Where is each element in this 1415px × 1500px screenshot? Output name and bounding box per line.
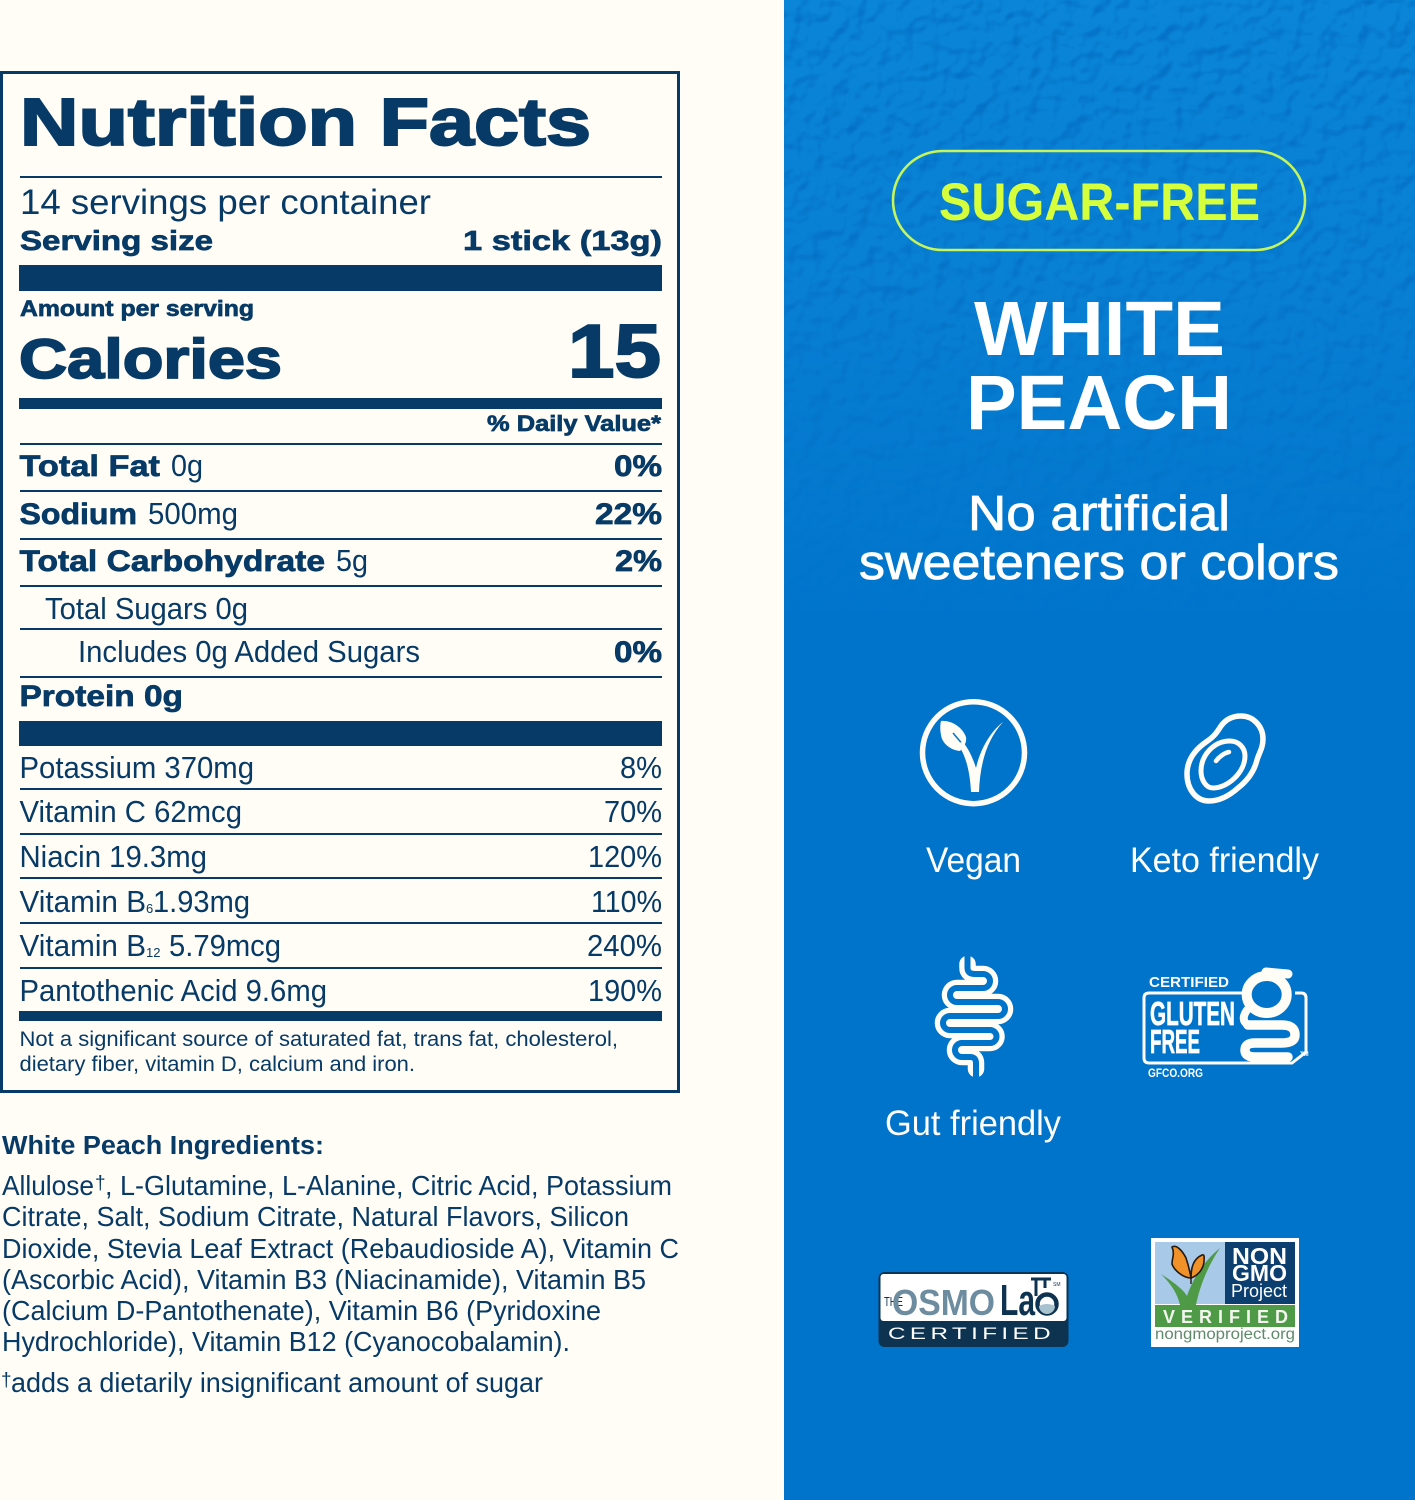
calories row: 15 (568, 309, 661, 393)
water droplet texture (784, 0, 1415, 390)
panel: blue product claims (784, 0, 1415, 1500)
title: white peach (966, 286, 1232, 446)
row: vitamin B6 (20, 884, 662, 919)
badge: sugar-free (893, 151, 1305, 250)
row: vitamin B12: 12 (146, 945, 160, 960)
row: vitamin B6: 110% (591, 884, 662, 919)
serving size row: Serving size (20, 225, 213, 256)
row: sodium (20, 496, 662, 531)
logo: certified gluten free: CERTIFIED (1149, 974, 1229, 991)
logo: certified gluten free: TM (1300, 1052, 1309, 1058)
title: white peach: WHITE (974, 286, 1225, 372)
label border (2, 72, 678, 1092)
ingredients list: (Calcium D-Pantothenate), Vitamin B6 (Pyridoxine (2, 1295, 601, 1326)
amount per serving: Amount per serving (20, 296, 254, 321)
logo: the osmo lab certified: SM (1053, 1282, 1060, 1288)
subtitle: No artificial (968, 487, 1230, 541)
row: added sugars (78, 634, 662, 669)
logo: the osmo lab certified: OSMO (892, 1282, 995, 1323)
logo: certified gluten free: GFCO.ORG (1148, 1068, 1203, 1080)
logo: the osmo lab certified: La (1000, 1276, 1035, 1325)
icon: avocado (1187, 716, 1263, 801)
servings per container: 14 servings per container (20, 183, 431, 222)
label footnote: Not a significant source of saturated fat, trans fat, cholesterol, (20, 1027, 618, 1051)
logo: certified gluten free: FREE (1150, 1023, 1200, 1060)
row: total fat: 0% (614, 450, 662, 483)
row: potassium: 8% (620, 750, 662, 785)
ingredients list: Hydrochloride), Vitamin B12 (Cyanocobalamin). (2, 1326, 570, 1357)
badge: sugar-free: SUGAR-FREE (939, 173, 1260, 232)
logo: the osmo lab certified: CERTIFIED (888, 1325, 1055, 1343)
blue background (784, 0, 1415, 1500)
subtitle (859, 487, 1339, 590)
row: potassium: Potassium 370mg (20, 750, 254, 785)
row: vitamin C: 70% (604, 794, 662, 829)
icon: gut (943, 950, 1005, 1085)
row: sodium: 500mg (148, 496, 238, 531)
ingredients list: , L-Glutamine, L-Alanine, Citric Acid, Potassium (105, 1170, 672, 1201)
ingredients list: (Ascorbic Acid), Vitamin B3 (Niacinamide), Vitamin B5 (2, 1264, 646, 1295)
row: niacin (20, 839, 662, 874)
ingredients list: Allulose (2, 1170, 94, 1201)
logo: non gmo project verified: nongmoproject.org (1155, 1326, 1295, 1343)
logo: non gmo project verified: Project (1231, 1281, 1287, 1301)
label footnote (20, 1027, 618, 1076)
calories row (19, 309, 661, 393)
label: gut friendly: Gut friendly (885, 1104, 1061, 1143)
ingredients list: Citrate, Salt, Sodium Citrate, Natural Flavors, Silicon (2, 1201, 629, 1232)
row: pantothenic acid: 190% (588, 973, 662, 1008)
row: sodium: 22% (595, 498, 662, 531)
row: pantothenic acid (20, 973, 662, 1008)
row: total carbohydrate: 5g (336, 543, 368, 578)
label: keto friendly: Keto friendly (1130, 841, 1319, 880)
ingredients heading: White Peach Ingredients: (2, 1132, 324, 1160)
row: niacin: 120% (588, 839, 662, 874)
row: vitamin B12: Vitamin B (20, 928, 146, 963)
row: total carbohydrate: Total Carbohydrate (20, 545, 325, 578)
row: pantothenic acid: Pantothenic Acid 9.6mg (20, 973, 327, 1008)
ingredients list (2, 1170, 679, 1357)
heading: Nutrition Facts: Nutrition Facts (20, 85, 591, 160)
row: vitamin B6: Vitamin B (20, 884, 146, 919)
row: vitamin B6: 1.93mg (153, 884, 250, 919)
logo: certified gluten free (1144, 972, 1309, 1080)
row: total fat: Total Fat (20, 450, 160, 483)
logo: non gmo project verified: VERIFIED (1163, 1307, 1288, 1327)
logo: the osmo lab certified: THE (884, 1294, 903, 1309)
row: added sugars: Includes 0g Added Sugars (78, 634, 420, 669)
row: niacin: Niacin 19.3mg (20, 839, 207, 874)
row: total fat: 0g (171, 448, 203, 483)
row: total fat (20, 448, 662, 483)
panel: nutrition facts label (2, 72, 678, 1092)
subtitle: sweeteners or colors (859, 536, 1339, 590)
row: vitamin C: Vitamin C 62mcg (20, 794, 242, 829)
row: added sugars: 0% (614, 636, 662, 669)
row: sodium: Sodium (20, 498, 137, 531)
row: potassium (20, 750, 662, 785)
ingredients footnote: adds a dietarily insignificant amount of sugar (11, 1367, 543, 1398)
logo: non gmo project verified (1151, 1238, 1299, 1347)
row: total sugars: Total Sugars 0g (45, 591, 248, 626)
logo: non gmo project verified: GMO (1232, 1260, 1287, 1286)
row: vitamin B12: 240% (587, 928, 662, 963)
label footnote: dietary fiber, vitamin D, calcium and iron. (20, 1052, 415, 1076)
serving size row (20, 225, 662, 256)
row: vitamin B12: 5.79mcg (169, 928, 281, 963)
row: vitamin B6: 6 (146, 901, 153, 916)
calories row: Calories (19, 327, 282, 390)
logo: certified gluten free: GLUTEN (1150, 995, 1235, 1032)
row: total carbohydrate: 2% (615, 545, 662, 578)
icon: vegan (922, 702, 1024, 804)
ingredients list: † (95, 1173, 106, 1194)
row: protein: Protein 0g (20, 680, 183, 713)
logo: non gmo project verified: NON (1232, 1243, 1287, 1269)
ingredients list: Dioxide, Stevia Leaf Extract (Rebaudioside A), Vitamin C (2, 1233, 679, 1264)
label: vegan: Vegan (926, 841, 1021, 880)
row: vitamin B12 (20, 928, 662, 963)
serving size row: 1 stick (13g) (463, 225, 662, 256)
ingredients footnote: † (1, 1370, 12, 1391)
row: vitamin C (20, 794, 662, 829)
row: total carbohydrate (20, 543, 662, 578)
logo: the osmo lab certified (878, 1272, 1068, 1347)
daily value header: % Daily Value* (487, 411, 661, 436)
title: white peach: PEACH (966, 360, 1232, 446)
